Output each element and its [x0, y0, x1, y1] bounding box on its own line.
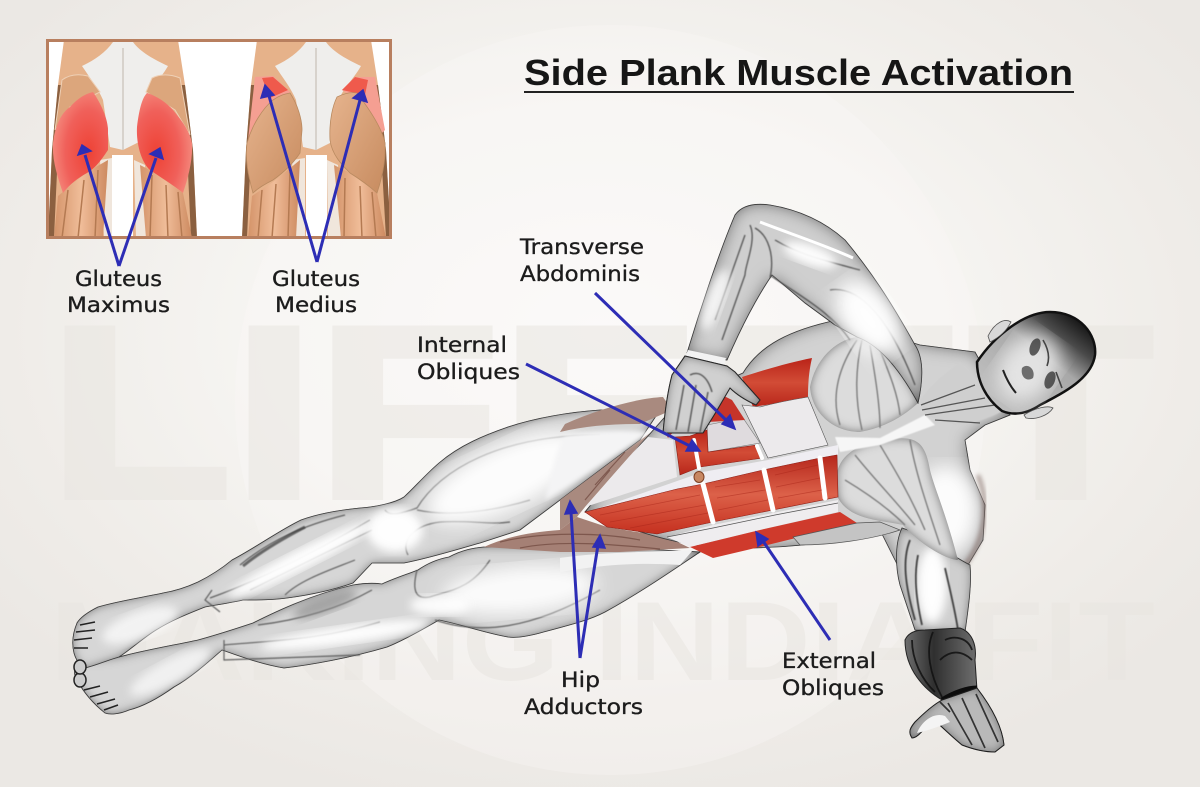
- gluteus maximus anatomy: [48, 40, 197, 240]
- gluteus medius anatomy: [242, 40, 391, 240]
- label: hip adductors: Adductors: [524, 695, 643, 720]
- label: gluteus maximus: Maximus: [67, 293, 170, 318]
- arrows: gluteus maximus: [78, 145, 163, 266]
- title: Side Plank Muscle Activation: [524, 52, 1073, 93]
- raised arm: [685, 204, 922, 403]
- navel: [694, 472, 704, 482]
- watermark: tagline: MAKING INDIA FIT: [50, 579, 1155, 704]
- arm detail: [715, 225, 915, 385]
- transverse abdominis window: [707, 418, 760, 452]
- label: hip adductors: [524, 668, 643, 720]
- label: internal obliques: [417, 333, 520, 385]
- upper rectus: [675, 430, 763, 475]
- watermark: brand: LIFEFIT: [48, 275, 1153, 549]
- label: hip adductors: Hip: [561, 668, 600, 693]
- label: gluteus maximus: [67, 267, 170, 318]
- watermark: large circle: [235, 25, 985, 775]
- bottom aponeurosis: [667, 500, 838, 547]
- hip adductors: [484, 397, 693, 572]
- ears: [988, 321, 1011, 342]
- label: gluteus medius: Gluteus: [272, 267, 360, 292]
- arrows: hip adductors: [565, 501, 605, 658]
- label: gluteus maximus: Gluteus: [75, 267, 162, 292]
- upper pectoral: [810, 337, 935, 452]
- top leg detail: [205, 435, 600, 612]
- label: external obliques: External: [782, 649, 876, 674]
- upper red serratus: [742, 358, 812, 407]
- label: transverse abdominis: [519, 235, 644, 287]
- lower leg detail: [224, 560, 600, 660]
- toes lower foot: [74, 673, 118, 710]
- arrows: gluteus medius: [261, 85, 367, 262]
- lower leg: [74, 547, 700, 714]
- figure: side plank body: [73, 204, 1095, 752]
- lower rectus: [585, 455, 838, 534]
- label: gluteus medius: [272, 267, 360, 318]
- lower arm: [896, 528, 1004, 752]
- hand on hip: [663, 356, 760, 433]
- label: transverse abdominis: Abdominis: [520, 262, 640, 287]
- wrist sleeve: [905, 628, 977, 700]
- top leg: [73, 410, 660, 674]
- label: internal obliques: Obliques: [417, 360, 520, 385]
- toes top foot: [74, 622, 95, 674]
- arrow: external obliques: [756, 532, 830, 640]
- panel: glute anatomy inset: [48, 40, 391, 240]
- label: external obliques: Obliques: [782, 676, 884, 701]
- label: gluteus medius: Medius: [275, 293, 357, 318]
- arrow: internal obliques: [526, 364, 700, 451]
- under-torso strip: [793, 522, 900, 545]
- external oblique bottom band: [690, 512, 857, 558]
- head: [977, 312, 1095, 419]
- label: transverse abdominis: Transverse: [519, 235, 644, 260]
- label: external obliques: [782, 649, 884, 701]
- arrow: transverse abdominis: [595, 293, 735, 429]
- torso: [585, 320, 1010, 570]
- facial features: [1003, 337, 1062, 393]
- face highlight: [984, 322, 1072, 414]
- planted hand: [910, 688, 1004, 752]
- neck: [920, 362, 1005, 425]
- external oblique flap lower: [585, 437, 677, 507]
- red muscles: abdominals: [585, 358, 900, 558]
- lower pectoral: [837, 438, 958, 560]
- white aponeurosis: [742, 397, 828, 458]
- label: internal obliques: Internal: [417, 333, 507, 358]
- white linea: [594, 445, 838, 517]
